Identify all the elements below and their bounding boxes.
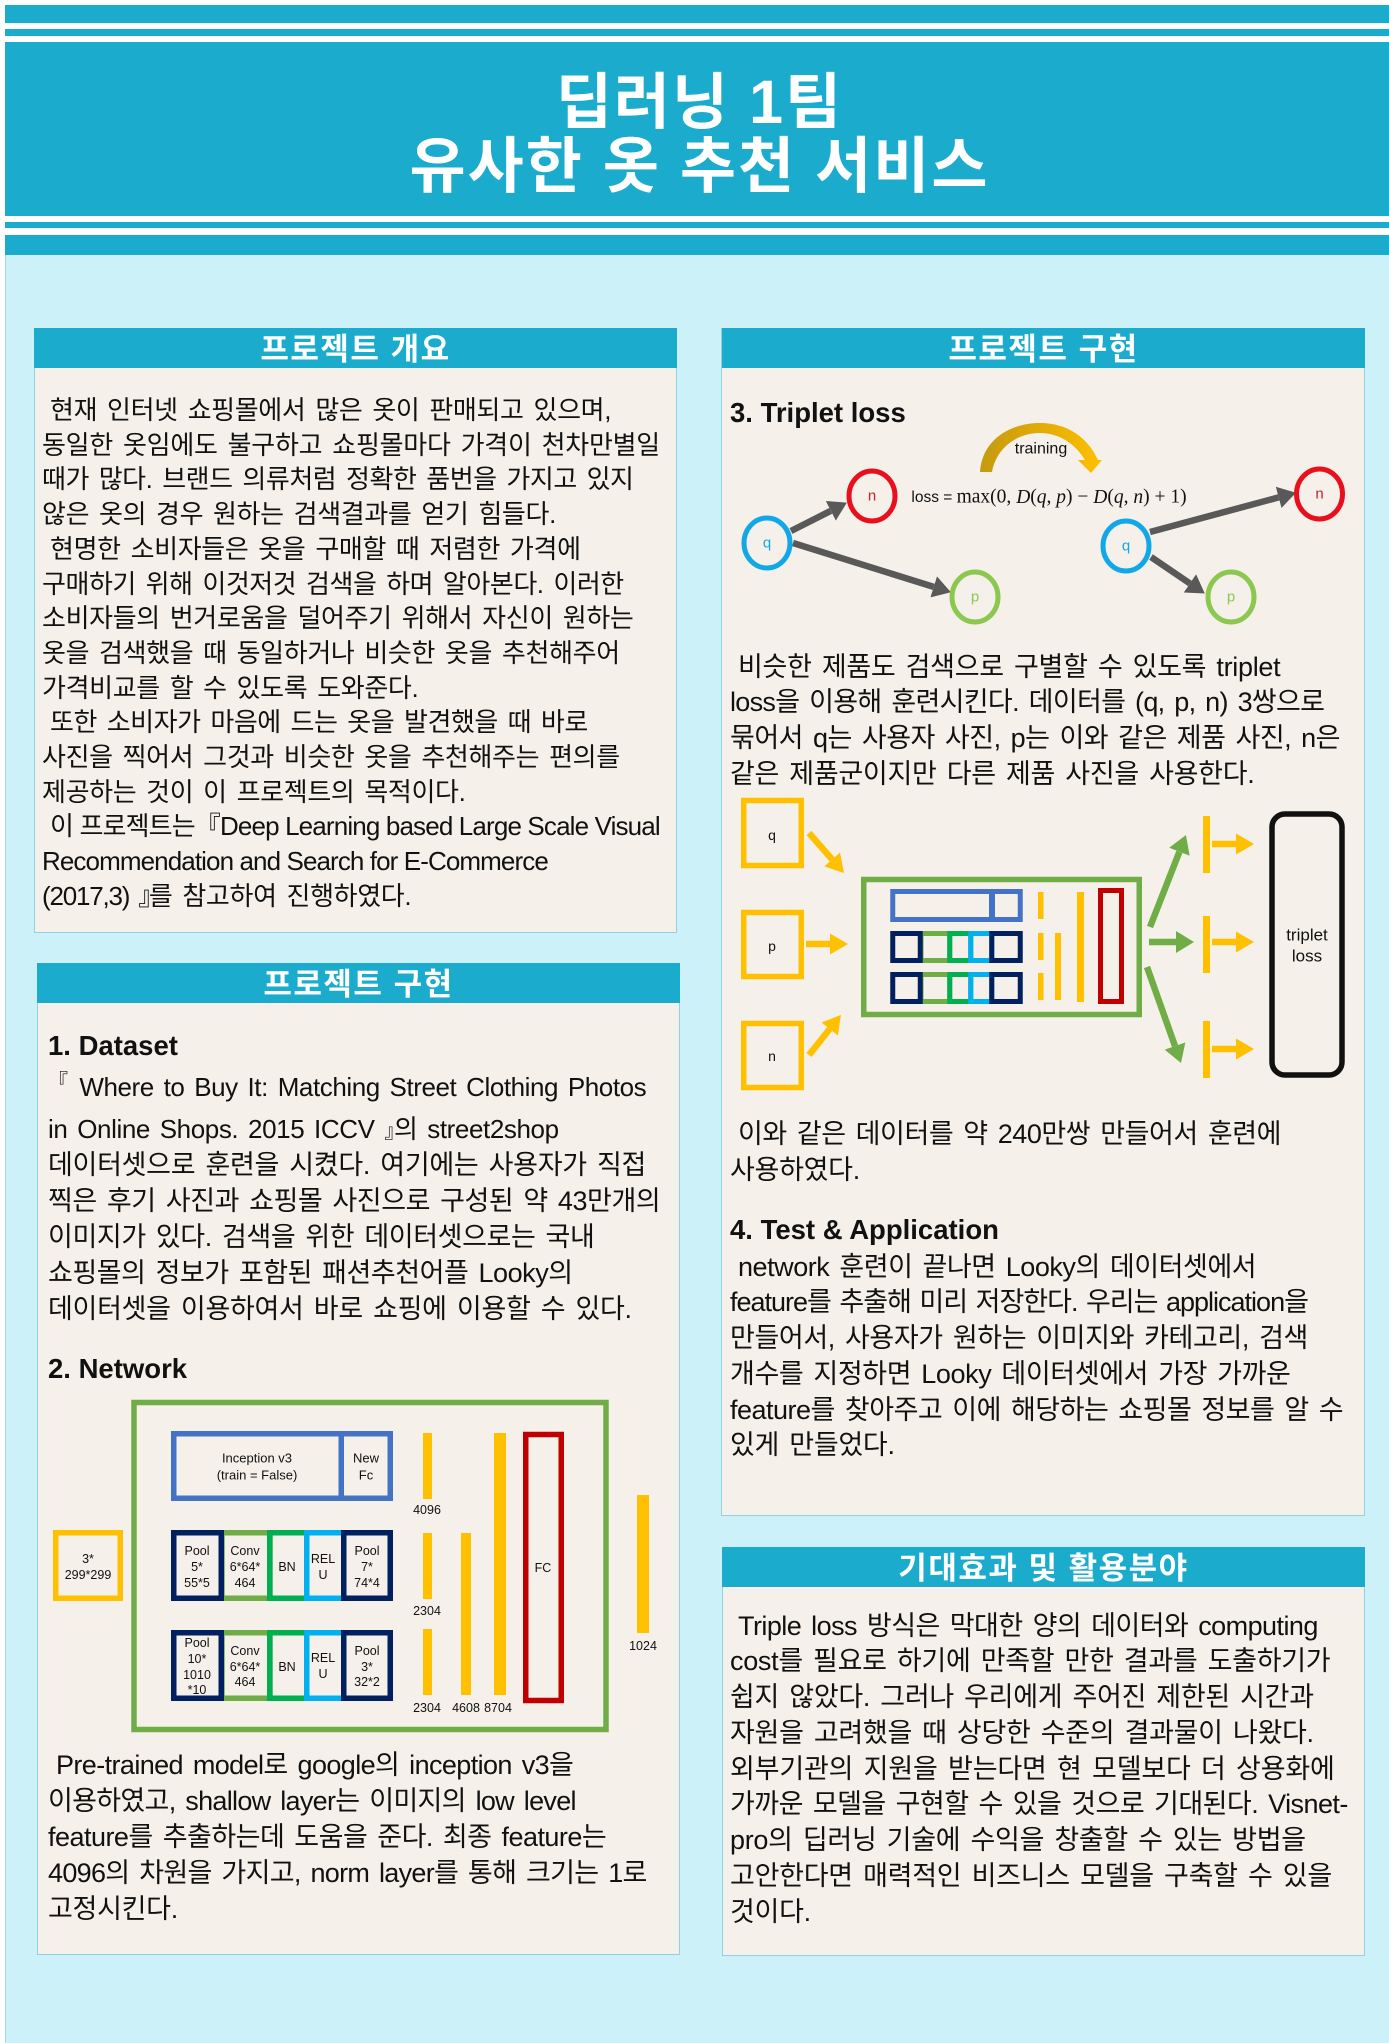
- conv block row 1: BN: [278, 1560, 296, 1574]
- after training arrows: [1150, 497, 1279, 583]
- conv block row 1: 55*5: [184, 1576, 210, 1590]
- text block: dataset: 『 Where to Buy It: Matching Street Clothing Photos: [48, 1071, 646, 1102]
- text block: project overview: 가격비교를 할 수 있도록 도와준다.: [42, 673, 418, 703]
- text block: network: 4096의 차원을 가지고, norm layer를 통해 크기는 1로: [48, 1858, 647, 1888]
- circles after training: n: [1315, 486, 1324, 502]
- conv block row 2: Conv: [230, 1644, 260, 1658]
- conv block row 2: *10: [188, 1683, 206, 1697]
- circles before training: p: [971, 588, 979, 606]
- conv block row 1: 7*: [361, 1560, 373, 1574]
- heading: triplet loss: 3. Triplet loss: [730, 397, 906, 428]
- text block: network: Pre-trained model로 google의 inception v3을: [56, 1750, 573, 1780]
- training arc arrow: training: [1015, 440, 1067, 458]
- heading: test and application: 4. Test & Application: [730, 1214, 999, 1245]
- text block: test and application: feature를 추출해 미리 저장한다. 우리는 application을: [730, 1287, 1308, 1317]
- heading: implementation left: 프로젝트 구현: [263, 967, 454, 1002]
- text block: network: [48, 1750, 647, 1924]
- conv block row 2: REL: [311, 1651, 335, 1665]
- text block: project overview: 옷을 검색했을 때 동일하거나 비슷한 옷을 추천해주어: [42, 638, 620, 668]
- bar labels: 4608: [452, 1701, 480, 1715]
- text block: expected effects: 가까운 모델을 구현할 수 있을 것으로 기대된다. Visnet-: [730, 1789, 1348, 1819]
- text block: network: 이용하였고, shallow layer는 이미지의 low level: [48, 1786, 576, 1816]
- title: [410, 68, 989, 200]
- panel: implementation right: [721, 328, 1365, 1516]
- circles before training: n: [868, 488, 876, 504]
- heading: implementation right: 프로젝트 구현: [948, 332, 1139, 367]
- bar labels: 4096: [413, 1503, 441, 1517]
- text block: project overview: 때가 많다. 브랜드 의류처럼 정확한 품번을 가지고 있지: [42, 464, 634, 494]
- inception block: New: [353, 1450, 380, 1466]
- circles after training: q: [1122, 538, 1130, 554]
- input boxes: n: [768, 1048, 776, 1064]
- bar labels: 2304: [413, 1604, 441, 1618]
- bar labels: 8704: [484, 1701, 512, 1715]
- chart: triplet network pipeline: [741, 798, 1345, 1090]
- text block: network: feature를 추출하는데 도움을 준다. 최종 feature는: [48, 1822, 606, 1852]
- circles after training: p: [1227, 588, 1235, 606]
- bar labels: [413, 1503, 657, 1715]
- heading: implementation left: [37, 963, 680, 1003]
- text block: expected effects: 쉽지 않았다. 그러나 우리에게 주어진 제한된 시간과: [730, 1682, 1314, 1712]
- text block: project overview: Recommendation and Search for E-Commerce: [42, 846, 548, 876]
- conv block row 1: U: [318, 1568, 328, 1582]
- text block: project overview: 동일한 옷임에도 불구하고 쇼핑몰마다 가격이 천차만별일: [42, 430, 660, 460]
- panel: expected effects: [722, 1547, 1365, 1956]
- fully connected block: FC: [535, 1561, 551, 1575]
- panel: project overview: [34, 328, 677, 933]
- heading: project overview: [34, 328, 677, 368]
- text block: project overview: 이 프로젝트는『Deep Learning based Large Scale Visual: [50, 811, 660, 841]
- header banner: [5, 5, 1389, 255]
- circles before training: q: [763, 534, 771, 552]
- text block: expected effects: [730, 1610, 1348, 1927]
- text block: network: 고정시킨다.: [48, 1894, 178, 1924]
- circles before training: [744, 471, 998, 622]
- bar labels: 1024: [629, 1639, 657, 1653]
- embedding bars: [1203, 816, 1210, 1078]
- text block: triplet loss: 비슷한 제품도 검색으로 구별할 수 있도록 triplet: [738, 652, 1280, 682]
- heading: network: 2. Network: [48, 1353, 187, 1384]
- conv block row 1: 464: [235, 1576, 255, 1590]
- output arrows: [1147, 852, 1179, 1046]
- circles after training: [1103, 469, 1342, 622]
- triplet loss box: triplet: [1286, 926, 1328, 944]
- text block: dataset: 찍은 후기 사진과 쇼핑몰 사진으로 구성된 약 43만개의: [48, 1186, 660, 1216]
- conv block row 2: U: [318, 1667, 328, 1681]
- text block: expected effects: Triple loss 방식은 막대한 양의 데이터와 computing: [738, 1610, 1318, 1640]
- text block: expected effects: 것이다.: [730, 1897, 811, 1927]
- text block: triplet loss: 묶어서 q는 사용자 사진, p는 이와 같은 제품 사진, n은: [730, 723, 1340, 753]
- input boxes: q: [768, 827, 776, 843]
- text block: triplet loss: [730, 652, 1340, 789]
- conv block row 1: Pool: [184, 1544, 210, 1558]
- chart: network architecture: [53, 1400, 657, 1732]
- conv block row 1: 74*4: [354, 1576, 380, 1590]
- input boxes: [744, 800, 801, 1088]
- text block: project overview: 현명한 소비자들은 옷을 구매할 때 저렴한 가격에: [50, 534, 581, 564]
- text block: dataset: [48, 1071, 660, 1324]
- text block: test and application: 개수를 지정하면 Looky 데이터셋에서 가장 가까운: [730, 1359, 1290, 1389]
- text block: dataset: in Online Shops. 2015 ICCV 』의 street2shop: [48, 1114, 559, 1144]
- bar labels: 2304: [413, 1701, 441, 1715]
- inception block: (train = False): [217, 1468, 297, 1482]
- text block: expected effects: pro의 딥러닝 기술에 수익을 창출할 수 있는 방법을: [730, 1825, 1306, 1855]
- text block: triplet loss: loss을 이용해 훈련시킨다. 데이터를 (q, p, n) 3쌍으로: [730, 687, 1324, 717]
- text block: expected effects: 고안한다면 매력적인 비즈니스 모델을 구축할 수 있을: [730, 1861, 1332, 1891]
- text block: project overview: 제공하는 것이 이 프로젝트의 목적이다.: [42, 777, 466, 807]
- conv block row 2: Pool: [184, 1636, 210, 1650]
- conv block row 2: 3*: [361, 1660, 373, 1674]
- before training arrows: [791, 511, 934, 587]
- conv block row 1: 6*64*: [230, 1560, 260, 1574]
- text block: project overview: 현재 인터넷 쇼핑몰에서 많은 옷이 판매되고 있으며,: [50, 395, 611, 425]
- text block: test and application: [730, 1252, 1343, 1460]
- triplet loss box: [1272, 814, 1342, 1075]
- text block: expected effects: 외부기관의 지원을 받는다면 현 모델보다 더 상용화에: [730, 1754, 1335, 1784]
- heading: dataset: 1. Dataset: [48, 1030, 178, 1061]
- heading: project overview: 프로젝트 개요: [260, 332, 451, 367]
- inception block: Inception v3: [222, 1450, 292, 1466]
- input box: 3*: [82, 1552, 94, 1566]
- input box: [56, 1533, 120, 1598]
- text block: triplet loss: 같은 제품군이지만 다른 제품 사진을 사용한다.: [730, 759, 1254, 789]
- text block: dataset: 이미지가 있다. 검색을 위한 데이터셋으로는 국내: [48, 1222, 594, 1252]
- conv block row 2: 10*: [188, 1652, 207, 1666]
- heading: expected effects: [722, 1547, 1365, 1587]
- text block: project overview: 또한 소비자가 마음에 드는 옷을 발견했을 때 바로: [50, 707, 588, 737]
- inception block: [174, 1431, 390, 1501]
- chart: triplet loss training diagram: [742, 423, 1345, 624]
- conv block row 2: Pool: [354, 1644, 380, 1658]
- heading: implementation right: [722, 328, 1365, 368]
- text block: expected effects: 자원을 고려했을 때 상당한 수준의 결과물이 나왔다.: [730, 1718, 1314, 1748]
- text block: project overview: 구매하기 위해 이것저것 검색을 하며 알아본다. 이러한: [42, 569, 624, 599]
- conv block row 2: 32*2: [354, 1675, 380, 1689]
- title: 유사한 옷 추천 서비스: [410, 132, 989, 200]
- text block: expected effects: cost를 필요로 하기에 만족할 만한 결과를 도출하기가: [730, 1646, 1330, 1676]
- text block: test and application: 만들어서, 사용자가 원하는 이미지와 카테고리, 검색: [730, 1323, 1308, 1353]
- conv block row 1: Conv: [230, 1544, 260, 1558]
- conv block row 2: 464: [235, 1675, 255, 1689]
- conv block row 2: [174, 1633, 390, 1698]
- text block: project overview: (2017,3) 』를 참고하여 진행하였다.: [42, 881, 411, 911]
- network outer frame: [134, 1402, 606, 1730]
- text block: test and application: network 훈련이 끝나면 Looky의 데이터셋에서: [738, 1252, 1256, 1282]
- embedding arrows: [1212, 844, 1236, 1049]
- text block: project overview: 않은 옷의 경우 원하는 검색결과를 얻기 힘들다.: [42, 499, 556, 529]
- panel: implementation left: [37, 963, 680, 1955]
- input boxes: p: [768, 938, 776, 954]
- text block: dataset: 데이터셋으로 훈련을 시켰다. 여기에는 사용자가 직접: [48, 1150, 646, 1180]
- training arc arrow: [980, 423, 1102, 473]
- conv block row 1: REL: [311, 1552, 335, 1566]
- triplet loss box: loss: [1292, 946, 1322, 966]
- text block: test and application: 있게 만들었다.: [730, 1430, 895, 1460]
- heading: expected effects: 기대효과 및 활용분야: [898, 1551, 1189, 1586]
- input box: 299*299: [65, 1568, 111, 1582]
- text block: dataset size: 사용하였다.: [730, 1155, 860, 1185]
- inception block: Fc: [359, 1468, 374, 1482]
- text block: dataset size: 이와 같은 데이터를 약 240만쌍 만들어서 훈련에: [738, 1118, 1281, 1148]
- text block: dataset size: [730, 1118, 1281, 1185]
- conv block row 2: 6*64*: [230, 1660, 260, 1674]
- text block: project overview: [42, 395, 660, 911]
- conv block row 1: 5*: [191, 1560, 203, 1574]
- title: 딥러닝 1팀: [556, 68, 843, 136]
- input arrows: [806, 833, 832, 1055]
- text block: project overview: 사진을 찍어서 그것과 비슷한 옷을 추천해주는 편의를: [42, 742, 620, 772]
- text block: dataset: 쇼핑몰의 정보가 포함된 패션추천어플 Looky의: [48, 1258, 573, 1288]
- conv block row 1: Pool: [354, 1544, 380, 1558]
- conv block row 2: BN: [278, 1660, 296, 1674]
- text block: project overview: 소비자들의 번거로움을 덜어주기 위해서 자신이 원하는: [42, 603, 633, 633]
- conv block row 2: 1010: [183, 1668, 211, 1682]
- network box: [864, 880, 1139, 1014]
- text block: test and application: feature를 찾아주고 이에 해당하는 쇼핑몰 정보를 알 수: [730, 1395, 1343, 1425]
- feature bars: [423, 1433, 649, 1695]
- loss formula: loss = max(0, D(q, p) − D(q, n) + 1): [911, 486, 1187, 508]
- fully connected block: [526, 1434, 561, 1700]
- text block: dataset: 데이터셋을 이용하여서 바로 쇼핑에 이용할 수 있다.: [48, 1294, 632, 1324]
- conv block row 1: [174, 1533, 390, 1598]
